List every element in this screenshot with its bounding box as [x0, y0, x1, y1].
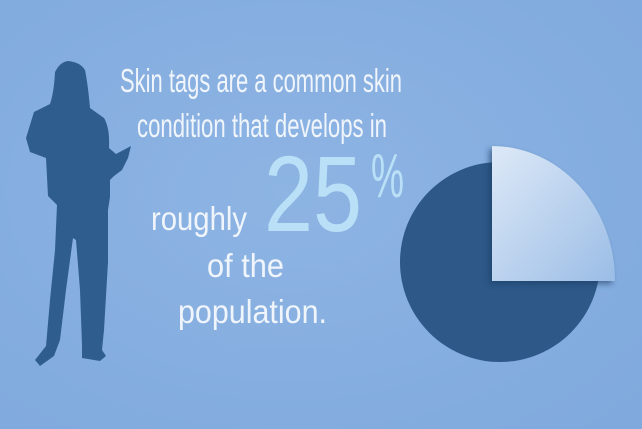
- pie wedge 25%: [492, 146, 615, 281]
- silhouette: woman holding tablet: [26, 61, 131, 366]
- statistic: roughly 25% of the population: roughly: [151, 200, 247, 237]
- headline text: Skin tags are a common skin: [120, 62, 402, 99]
- statistic: roughly 25% of the population: 25: [264, 133, 362, 254]
- statistic: roughly 25% of the population: %: [371, 142, 404, 211]
- pie chart: 75% dark with 25% pulled-out wedge: [400, 146, 615, 362]
- statistic: roughly 25% of the population: [151, 133, 404, 330]
- statistic: roughly 25% of the population: population.: [178, 293, 327, 330]
- headline text: [120, 62, 402, 144]
- wedge shadow: [489, 149, 612, 284]
- statistic: roughly 25% of the population: of the: [207, 247, 284, 284]
- headline text: condition that develops in: [137, 107, 387, 144]
